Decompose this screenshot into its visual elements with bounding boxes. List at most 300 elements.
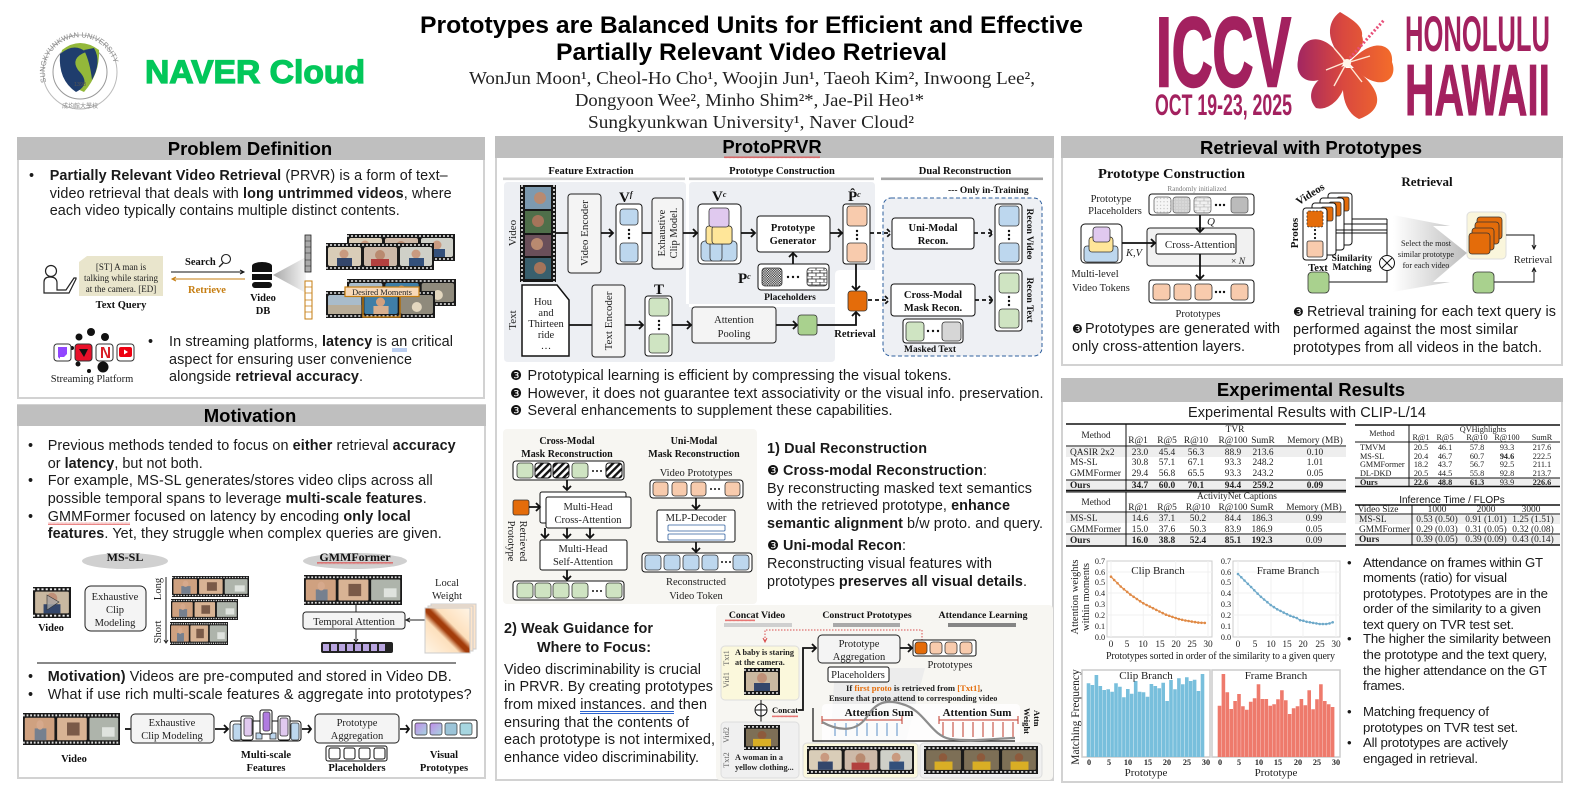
masked text tokens: Masked Text — [904, 345, 957, 355]
chart axis labels: within moments — [1081, 563, 1092, 631]
table: TVR: 93.3 — [1225, 458, 1242, 468]
table: TVR: 65.5 — [1188, 469, 1205, 479]
diagram: proposed pipeline: Exhaustive — [149, 718, 196, 729]
table: QVHighlights: 213.7 — [1533, 469, 1551, 478]
diagram: prototype construction: Prototype Construction — [1098, 166, 1246, 181]
table: ActivityNet Captions: 186.3 — [1251, 514, 1273, 524]
table: TVR: 93.3 — [1225, 469, 1242, 479]
text block: latency — [148, 334, 453, 385]
cross-modal mask reconstruction: Multi-Head — [564, 502, 613, 513]
icon: user at laptop — [44, 266, 76, 293]
icon: video DB — [250, 257, 306, 317]
table: QVHighlights: R@100 — [1494, 433, 1520, 442]
attention pooling: Pooling — [718, 329, 751, 340]
text block: motivation: • — [28, 687, 33, 703]
table: QVHighlights: 55.8 — [1470, 469, 1484, 478]
video 2 card: A woman in a — [735, 753, 783, 762]
table: inference time and FLOPs: Video Size — [1358, 505, 1398, 515]
tokens Vf: V — [619, 190, 630, 206]
table: QVHighlights: R@10 — [1466, 433, 1488, 442]
tokens Vc — [698, 189, 741, 264]
heading: Experimental Results: Experimental Results — [1217, 379, 1405, 400]
text block: weak guidance: Video discriminability is crucial — [504, 662, 701, 678]
text block: weak guidance: enhance video discriminability. — [504, 750, 699, 766]
text block: attendance findings: Attendance on frames within GT — [1363, 555, 1543, 570]
text block: attendance findings: moments (ratio) for visual — [1363, 570, 1507, 585]
title: Partially Relevant Video Retrieval — [556, 39, 947, 66]
guidance note: Ensure that proto attend to corresponding video — [829, 694, 997, 703]
heading: Problem Definition: Problem Definition — [168, 138, 332, 159]
diagram: prototype construction: Q — [1207, 216, 1215, 228]
table: ActivityNet Captions: 52.4 — [1190, 536, 1207, 546]
chart: clip branch attention: 15 — [1155, 640, 1165, 650]
chart: clip branch matching frequency: 10 — [1124, 758, 1132, 767]
video filmstrip input — [507, 185, 556, 282]
table: ActivityNet Captions — [1066, 492, 1346, 546]
table: TVR: 45.4 — [1159, 448, 1176, 458]
text block: previous methods: Previous methods tended to focus on either retrieval accuracy — [48, 438, 456, 454]
placeholders: c — [747, 272, 751, 281]
table: QVHighlights: 44.5 — [1438, 469, 1452, 478]
diagram: prototype construction: K,V — [1125, 248, 1144, 259]
logo: ICCV 2025 Honolulu Hawaii: ICCV — [1156, 0, 1291, 107]
text block: prototypes generated — [1072, 321, 1280, 355]
heading: Retrieval with Prototypes: Retrieval with Prototypes — [1200, 137, 1422, 158]
table: ActivityNet Captions: 0.05 — [1306, 525, 1323, 535]
arrows: search and retrieve — [171, 254, 245, 296]
chart: frame branch matching frequency: 5 — [1237, 758, 1241, 767]
text block: previous methods: For example, MS-SL generates/stores video clips across all — [48, 473, 433, 489]
text block: dual reconstruction: Cross-modal Reconstruction: — [783, 463, 987, 479]
text input document: … — [541, 341, 551, 352]
text block: weak guidance: Where to Focus: — [537, 640, 651, 656]
chart: frame branch matching frequency: 25 — [1313, 758, 1321, 767]
text block: matching frequency findings: • — [1347, 735, 1352, 750]
text input document: ride — [538, 330, 554, 341]
attention curve: Weight — [1022, 708, 1032, 734]
cross-modal mask recon: Cross-Modal — [904, 290, 962, 301]
text encoder — [592, 285, 625, 357]
table: inference time and FLOPs: 2000 — [1477, 505, 1496, 515]
text input document: and — [538, 308, 554, 319]
attention pooling — [692, 307, 776, 343]
text embedding token — [798, 315, 817, 335]
table: TVR: 60.0 — [1159, 481, 1176, 491]
text block: retrieval training: ❸ — [1293, 305, 1304, 319]
attention curve: Attention Sum — [943, 707, 1011, 719]
text block: retrieval training: prototypes from all videos in the batch. — [1293, 340, 1542, 356]
diagram: GMMFormer: Local — [435, 578, 459, 589]
stage headings: Construct Prototypes — [822, 610, 912, 621]
table: QVHighlights: 94.6 — [1500, 452, 1514, 461]
table: QVHighlights: 43.7 — [1438, 460, 1452, 469]
table: ActivityNet Captions: 15.0 — [1132, 525, 1149, 535]
video 1 card — [721, 646, 799, 700]
diagram: retrieval: Retrieval — [1514, 255, 1552, 266]
text block: PRVR definition: Partially Relevant Video Retrieval (PRVR) is a form of text– — [50, 168, 448, 184]
prototype generator: Generator — [770, 236, 817, 247]
video stack: Videos — [1294, 181, 1328, 208]
diagram: GMMFormer: GMMFormer — [319, 550, 391, 564]
table: ActivityNet Captions: 186.9 — [1251, 525, 1273, 535]
exhaustive clip model — [652, 198, 683, 269]
guidance note: If first proto is retrieved from [Txt1], — [846, 683, 982, 693]
table: QVHighlights: GMMFormer — [1360, 460, 1405, 469]
logo: Sungkyunkwan University: 1398 — [74, 82, 86, 88]
text block: motivation: Motivation) Videos are pre-computed and stored in Video DB. — [48, 669, 452, 685]
text block: matching frequency findings: engaged in retrieval. — [1363, 751, 1478, 766]
video film strips — [326, 234, 456, 318]
diagram: retrieval: Retrieval — [1401, 174, 1453, 189]
stage headings — [503, 166, 1043, 180]
heading: ProtoPRVR: ProtoPRVR — [722, 136, 822, 157]
recon text tokens — [995, 270, 1034, 331]
table: QVHighlights: 20.5 — [1414, 469, 1428, 478]
stage headings: Prototype Construction — [729, 166, 835, 177]
text block: retrieval training — [1293, 304, 1556, 356]
table: TVR: R@100 — [1219, 436, 1248, 446]
table: TVR: 57.1 — [1159, 458, 1176, 468]
authors and affiliations: Dongyoon Wee², Minho Shim²*, Jae-Pil Heo¹* — [575, 90, 924, 110]
table: TVR: MS-SL — [1070, 458, 1098, 468]
diagram: proposed pipeline — [23, 710, 477, 774]
heading: Motivation: Motivation — [204, 405, 296, 426]
chart: frame branch attention: 15 — [1282, 640, 1292, 650]
stage headings: Attendance Learning — [938, 610, 1028, 621]
chart: frame branch attention: 20 — [1298, 640, 1308, 650]
chart: frame branch attention: Frame Branch — [1257, 565, 1320, 577]
text block: motivation — [28, 669, 472, 703]
chart: clip branch attention: 0.3 — [1095, 600, 1105, 609]
retrieval node — [834, 291, 876, 340]
prototype generator — [757, 216, 830, 252]
table: QVHighlights: SumR — [1532, 433, 1553, 442]
table: ActivityNet Captions: Method — [1081, 498, 1111, 508]
table: QVHighlights: MS-SL — [1360, 452, 1384, 461]
text block: dual reconstruction: Reconstructing visual features with — [767, 556, 992, 572]
table: ActivityNet Captions: 37.1 — [1159, 514, 1176, 524]
video 2 card: Txt2 — [722, 752, 731, 768]
concat operator — [755, 700, 798, 722]
table: QVHighlights: 93.3 — [1500, 443, 1514, 452]
chart: clip branch attention: 30 — [1203, 640, 1213, 650]
table: ActivityNet Captions: R@100 — [1219, 503, 1248, 513]
table: ActivityNet Captions: 37.6 — [1159, 525, 1176, 535]
chart: clip branch matching frequency: 5 — [1107, 758, 1111, 767]
placeholders: Placeholders — [764, 293, 816, 303]
text block: prototypes generated: Prototypes are generated with — [1085, 321, 1280, 337]
recon video tokens: Recon Video — [1024, 209, 1034, 260]
table: TVR: GMMFormer — [1070, 469, 1122, 479]
attention pooling: Attention — [714, 315, 755, 326]
table: QVHighlights: 18.2 — [1414, 460, 1428, 469]
subtitle: Experimental Results with CLIP-L/14 — [1188, 405, 1426, 421]
table: TVR: 70.1 — [1188, 481, 1205, 491]
table: inference time and FLOPs: 0.31 (0.05) — [1465, 524, 1507, 535]
cross-modal mask recon: Mask Recon. — [904, 303, 963, 314]
uni-modal mask reconstruction: Video Prototypes — [660, 468, 732, 479]
table: QVHighlights: 93.9 — [1500, 478, 1514, 487]
text block: PRVR definition — [29, 168, 452, 219]
authors and affiliations — [469, 68, 1035, 132]
video film strips: Desired Moments — [352, 288, 412, 297]
table: TVR: 259.2 — [1252, 481, 1274, 491]
tokens Vf: f — [630, 190, 634, 199]
diagram: retrieval: Select the most — [1401, 239, 1452, 248]
diagram: prototype construction: Multi-level — [1071, 269, 1119, 280]
diagram: MS-SL: Modeling — [95, 618, 136, 629]
uni-modal recon: Recon. — [918, 236, 949, 247]
text query note: talking while staring — [84, 273, 158, 283]
chart: clip branch attention: 0.4 — [1095, 589, 1105, 598]
authors and affiliations: WonJun Moon¹, Cheol-Ho Cho¹, Woojin Jun¹, Taeoh Kim², Inwoong Lee², — [469, 68, 1035, 88]
chart: clip branch matching frequency: 0 — [1087, 758, 1091, 767]
uni-modal mask reconstruction — [642, 436, 752, 602]
text block: attendance findings: text query on TVR test set. — [1363, 617, 1514, 632]
text block: dual reconstruction: prototypes preserves all visual details. — [767, 574, 1027, 590]
chart: clip branch attention: 25 — [1187, 640, 1197, 650]
diagram: MS-SL: MS-SL — [107, 550, 143, 564]
text query note — [79, 256, 163, 311]
table: ActivityNet Captions: GMMFormer — [1070, 525, 1122, 535]
chart: clip branch attention: 0.2 — [1095, 611, 1105, 620]
attention curve — [813, 702, 1042, 744]
table: TVR: 0.09 — [1307, 481, 1324, 491]
stage headings: Concat Video — [729, 610, 785, 621]
text block: attendance findings: order of the similarity to a given — [1363, 601, 1541, 616]
cross-modal mask reconstruction: Cross-Modal — [539, 436, 595, 447]
text block: PRVR definition: each video typically contains multiple distinct contents. — [50, 203, 400, 219]
cross-modal mask reconstruction: Prototype — [505, 521, 516, 562]
cross-modal mask reconstruction — [505, 436, 631, 600]
diagram: retrieval: Text — [1308, 263, 1328, 274]
table: QVHighlights: R@1 — [1412, 433, 1430, 442]
chart: clip branch attention: 0.5 — [1095, 578, 1105, 587]
chart: clip branch attention: 20 — [1171, 640, 1181, 650]
text block: previous methods — [28, 438, 456, 542]
video 2 card: Vid2 — [722, 727, 731, 743]
uni-modal mask reconstruction: Uni-Modal — [671, 436, 718, 447]
text input document: Thirteen — [528, 319, 565, 330]
diagram: MS-SL: Video — [38, 623, 64, 634]
table: QVHighlights: 46.1 — [1438, 443, 1452, 452]
logo: ICCV 2025 Honolulu Hawaii — [1155, 0, 1550, 131]
table: TVR: 1.01 — [1307, 458, 1324, 468]
text block: attendance findings: frames. — [1363, 678, 1405, 693]
logo: Sungkyunkwan University: 成均館大學校 — [62, 102, 98, 110]
authors and affiliations: Sungkyunkwan University¹, Naver Cloud² — [588, 112, 914, 132]
table: inference time and FLOPs: MS-SL — [1359, 515, 1387, 525]
table: TVR: R@10 — [1184, 436, 1208, 446]
icons: streaming platforms — [51, 328, 134, 385]
table: QVHighlights: Method — [1369, 429, 1395, 438]
text block: summary points: ❸ — [510, 368, 522, 384]
text block: motivation: • — [28, 669, 33, 685]
icons: streaming platforms: Streaming Platform — [51, 374, 133, 385]
table: QVHighlights: R@5 — [1436, 433, 1454, 442]
table: TVR: 248.2 — [1252, 458, 1274, 468]
diagram: GMMFormer: Temporal Attention — [313, 617, 396, 628]
cross-modal mask reconstruction: Multi-Head — [558, 544, 608, 555]
video stack: Protos — [1289, 217, 1301, 248]
text block: previous methods: possible temporal spans to leverage multi-scale features. — [48, 491, 427, 507]
chart axis labels: Attention weights — [1070, 560, 1081, 634]
table: inference time and FLOPs: 0.91 (1.01) — [1465, 514, 1507, 525]
table: QVHighlights: 226.6 — [1533, 478, 1551, 487]
table: ActivityNet Captions: R@10 — [1186, 503, 1210, 513]
text block: matching frequency findings: • — [1347, 704, 1352, 719]
diagram: mask reconstruction — [503, 429, 757, 604]
logo: ICCV 2025 Honolulu Hawaii: OCT 19-23, 2025 — [1155, 89, 1292, 122]
uni-modal mask reconstruction: Mask Reconstruction — [648, 449, 740, 460]
chart: frame branch attention: 0.7 — [1221, 557, 1231, 566]
table: ActivityNet Captions: SumR — [1250, 503, 1274, 513]
text block: dual reconstruction: By reconstructing masked text semantics — [767, 481, 1032, 497]
table: TVR: R@5 — [1157, 436, 1177, 446]
table: inference time and FLOPs: GMMFormer — [1359, 525, 1411, 535]
chart: frame branch matching frequency: 0 — [1218, 758, 1222, 767]
chart: clip branch matching frequency: 15 — [1144, 758, 1152, 767]
table: QVHighlights: 46.7 — [1438, 452, 1452, 461]
bottom film strips — [803, 743, 1042, 778]
table: QVHighlights: 211.1 — [1533, 460, 1551, 469]
chart axis labels: Prototypes sorted in order of the similarity to a given query — [1106, 651, 1335, 662]
text block: summary points — [510, 368, 1044, 419]
chart: clip branch attention: 0.6 — [1095, 568, 1105, 577]
text block: previous methods: or latency, but not both. — [48, 456, 203, 472]
cross-modal mask recon — [891, 284, 975, 316]
diagram: proposed pipeline: Features — [247, 763, 285, 774]
text block: summary points: ❸ — [510, 403, 522, 419]
video 1 card: at the camera. — [735, 658, 785, 667]
tokens Vc: V — [712, 189, 723, 205]
table: ActivityNet Captions: MS-SL — [1070, 514, 1098, 524]
exhaustive clip model: Clip Model. — [669, 208, 680, 258]
table: ActivityNet Captions: 85.1 — [1225, 536, 1242, 546]
text block: dual reconstruction: with the retrieved prototype, enhance — [766, 498, 1010, 514]
table: TVR: R@1 — [1128, 436, 1148, 446]
table: TVR: 243.2 — [1252, 469, 1274, 479]
text block: attendance findings: • — [1347, 631, 1352, 646]
exhaustive clip model: Exhaustive — [657, 209, 668, 256]
chart: frame branch attention: 0.0 — [1221, 633, 1231, 642]
chart: clip branch matching frequency: 20 — [1163, 758, 1171, 767]
masked text tokens — [903, 319, 963, 355]
chart: clip branch attention: 10 — [1138, 640, 1148, 650]
text block: retrieval training: performed against the most similar — [1293, 322, 1518, 338]
architecture diagram — [503, 166, 1043, 362]
chart: frame branch attention: 0.5 — [1221, 578, 1231, 587]
chart: clip branch attention: 0.1 — [1095, 622, 1105, 631]
stage headings: Feature Extraction — [548, 166, 634, 177]
attention curve: Attention Sum — [845, 707, 913, 719]
table: QVHighlights: 60.7 — [1470, 452, 1484, 461]
diagram: prototype construction: Prototype — [1091, 194, 1132, 205]
icon: video DB: Video — [250, 293, 276, 304]
video filmstrip input: Video — [507, 219, 519, 246]
table: inference time and FLOPs: 0.39 (0.05) — [1416, 534, 1458, 545]
uni-modal mask reconstruction: MLP-Decoder — [666, 513, 727, 524]
text block: summary points: However, it does not guarantee text associativity or the visual info. preservation. — [528, 386, 1044, 402]
chart: frame branch matching frequency: Prototype — [1255, 767, 1298, 779]
table: ActivityNet Captions: ActivityNet Captions — [1197, 492, 1277, 502]
chart: frame branch matching frequency: 20 — [1294, 758, 1302, 767]
diagram: MS-SL: Exhaustive — [92, 592, 139, 603]
chart: clip branch attention: 0.7 — [1095, 557, 1105, 566]
text block: latency: aspect for ensuring user convenience — [169, 352, 412, 368]
table: ActivityNet Captions: 16.0 — [1132, 536, 1149, 546]
retrieval node: Retrieval — [834, 329, 876, 340]
diagram: retrieval — [1289, 174, 1552, 293]
text block: weak guidance: in PRVR. By creating prototypes — [504, 679, 713, 695]
table: inference time and FLOPs: Ours — [1359, 535, 1380, 545]
recon video tokens — [995, 204, 1034, 264]
text block: PRVR definition: video retrieval that deals with long untrimmed videos, where — [50, 186, 452, 202]
text query note: [ST] A man is — [96, 262, 147, 272]
table: QVHighlights: 61.3 — [1470, 478, 1484, 487]
text block: latency: • — [148, 334, 153, 350]
stage headings — [724, 610, 1028, 627]
chart: frame branch matching frequency: Frame Branch — [1245, 670, 1308, 682]
panel: Problem Definition — [17, 137, 485, 398]
table: inference time and FLOPs: 1000 — [1428, 505, 1447, 515]
cross-modal mask reconstruction: Self-Attention — [553, 557, 614, 568]
uni-modal recon — [892, 218, 974, 249]
diagram: retrieval: Similarity — [1332, 254, 1373, 264]
table: ActivityNet Captions: 192.3 — [1251, 536, 1273, 546]
uni-modal mask reconstruction: Reconstructed — [666, 577, 727, 588]
diagram: MS-SL: Short — [153, 621, 164, 643]
diagram: GMMFormer — [303, 550, 476, 653]
arrows: search and retrieve: Search — [185, 257, 216, 268]
text block: weak guidance: 2) Weak Guidance for — [504, 621, 653, 637]
text block: summary points: ❸ — [510, 386, 522, 402]
attention curve: Attn — [1032, 710, 1042, 727]
chart: frame branch attention: 0.3 — [1221, 600, 1231, 609]
text block: summary points: Prototypical learning is efficient by compressing the visual tokens. — [528, 368, 952, 384]
table: inference time and FLOPs: 0.53 (0.50) — [1416, 514, 1458, 525]
diagram: proposed pipeline: Placeholders — [328, 763, 386, 774]
chart: frame branch attention: 5 — [1253, 640, 1258, 650]
table: ActivityNet Captions: 50.2 — [1190, 514, 1207, 524]
text encoder: Text Encoder — [603, 291, 615, 350]
table: inference time and FLOPs: Inference Time / FLOPs — [1399, 495, 1505, 506]
chart axis labels — [1070, 560, 1335, 765]
placeholders — [738, 264, 829, 303]
table: QVHighlights: QVHighlights — [1460, 425, 1506, 434]
diagram: prototype construction: × N — [1231, 257, 1246, 267]
text input document: Text — [507, 310, 519, 330]
diagram: proposed pipeline: Video — [61, 754, 87, 765]
arrows: search and retrieve: Retrieve — [188, 285, 226, 296]
text block: weak guidance: ensuring that the contents of — [504, 715, 690, 731]
video encoder — [568, 194, 601, 273]
table: ActivityNet Captions: Ours — [1070, 536, 1091, 546]
text block: previous methods: • — [28, 509, 33, 525]
table: TVR: 88.9 — [1225, 448, 1242, 458]
table: inference time and FLOPs: 0.29 (0.03) — [1416, 524, 1458, 535]
chart: frame branch matching frequency — [1212, 670, 1340, 779]
panel: Retrieval with Prototypes — [1061, 136, 1563, 365]
placeholders: P — [738, 271, 747, 287]
chart: frame branch matching frequency: 30 — [1332, 758, 1340, 767]
table: inference time and FLOPs: 0.43 (0.14) — [1512, 534, 1554, 545]
video stack — [1289, 181, 1352, 260]
text block: attendance findings: • — [1347, 555, 1352, 570]
table: TVR: TVR — [1226, 425, 1245, 435]
table: ActivityNet Captions: 84.4 — [1225, 514, 1242, 524]
text block: previous methods: features. Yet, they struggle when complex queries are given. — [48, 526, 442, 542]
